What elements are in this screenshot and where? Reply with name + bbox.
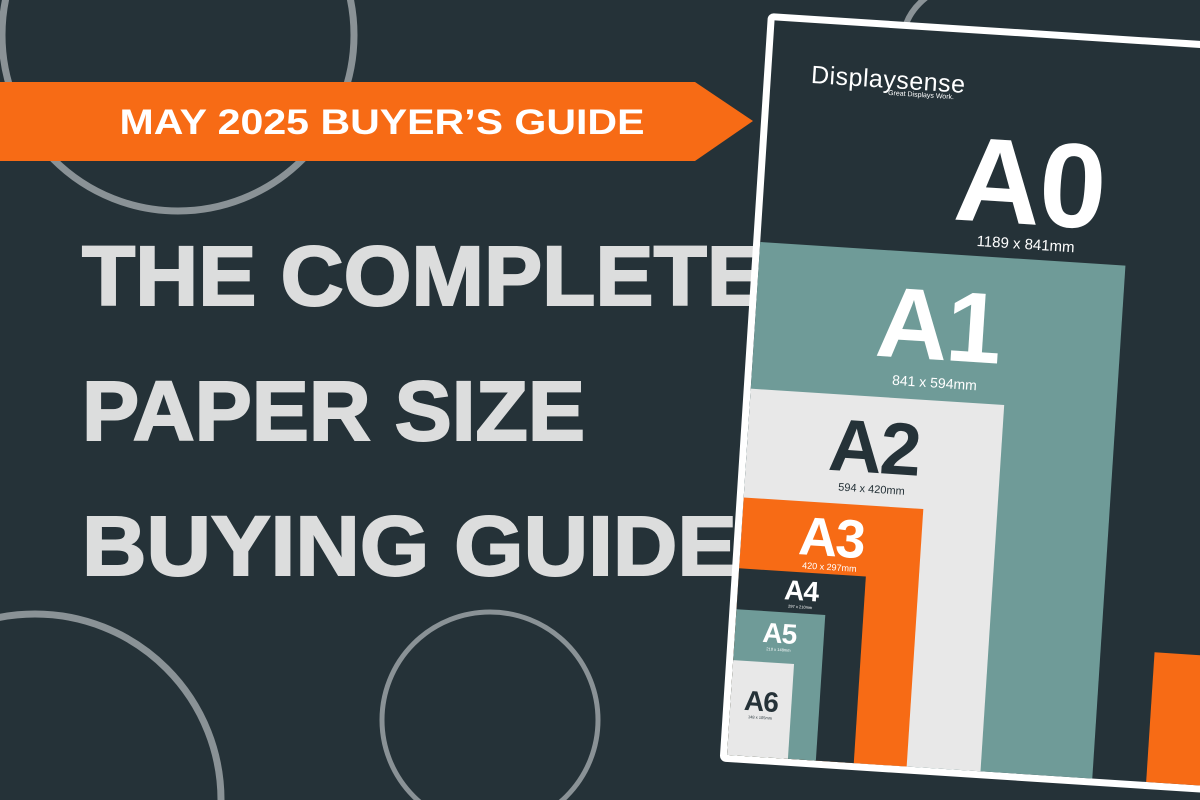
A2 panel: A2 — [826, 403, 922, 492]
A1 panel — [724, 242, 1125, 800]
title: THE COMPLETE — [82, 229, 765, 323]
logo: Displaysense: Great Displays Work. — [888, 90, 954, 101]
title — [82, 229, 765, 593]
A3 panel: A3 — [797, 506, 866, 570]
A1 panel: A1 — [873, 266, 1004, 386]
A0 label: A0 — [951, 112, 1108, 255]
title: BUYING GUIDE — [82, 499, 737, 593]
A3 panel — [723, 497, 923, 800]
banner: buyer's guide — [0, 82, 753, 161]
A1 panel: 841 x 594mm — [892, 372, 977, 393]
A5 panel: 210 x 148mm — [766, 646, 791, 653]
A4 panel: 297 x 210mm — [788, 604, 812, 610]
orange block at right edge — [1144, 652, 1200, 800]
A5 panel: A5 — [762, 617, 797, 650]
A0 label: 1189 x 841mm — [976, 233, 1075, 256]
A6 panel — [723, 660, 794, 800]
A4 panel — [723, 568, 866, 800]
A6 panel: 148 x 105mm — [748, 714, 772, 721]
poster: paper sizes chart — [720, 13, 1200, 800]
title: PAPER SIZE — [82, 364, 585, 458]
logo: Displaysense: Displaysense — [810, 61, 966, 99]
A6 panel: A6 — [743, 685, 779, 718]
banner: buyer's guide: MAY 2025 BUYER’S GUIDE — [120, 103, 644, 142]
A4 panel: A4 — [783, 574, 819, 607]
A2 panel: 594 x 420mm — [838, 482, 905, 498]
A2 panel — [724, 389, 1004, 800]
A3 panel: 420 x 297mm — [802, 560, 857, 574]
A5 panel — [724, 609, 825, 800]
